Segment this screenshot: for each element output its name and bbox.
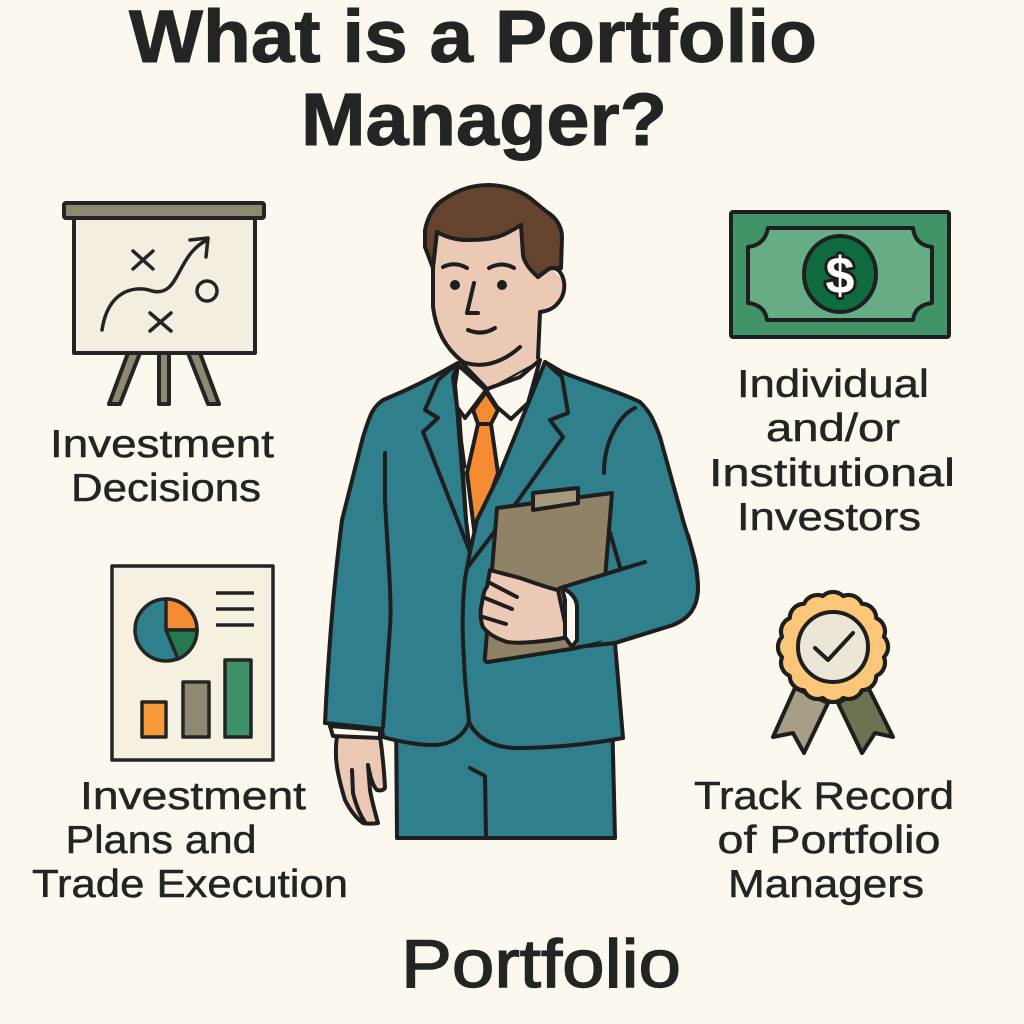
ear and neck: [538, 268, 564, 358]
icon: award ribbon badge: [773, 592, 893, 753]
figure: portfolio manager: [325, 185, 698, 838]
right cuff: [562, 588, 577, 647]
hand finger line: [352, 770, 365, 822]
label: track record: Track Record: [694, 775, 954, 818]
collar left: [455, 365, 486, 418]
jacket: [325, 362, 698, 748]
lapel right: [467, 362, 568, 568]
collar neck line: [462, 360, 540, 389]
hair: [425, 185, 562, 277]
fingers: [483, 583, 517, 624]
title: [129, 0, 817, 161]
label: investment plans: Plans and: [66, 819, 256, 862]
brows, nose and mouth: [443, 264, 514, 333]
shirt edges: [457, 407, 528, 473]
label: investors: [709, 363, 955, 539]
right sleeve fill: [562, 545, 696, 646]
trousers: [396, 712, 615, 838]
label: investment decisions: Investment: [50, 423, 274, 466]
label: track record: of Portfolio: [718, 819, 940, 862]
trouser pocket: [470, 768, 486, 838]
collar right: [486, 360, 540, 419]
clipboard: [485, 493, 612, 662]
lapel left: [423, 363, 470, 552]
tie: [467, 392, 498, 537]
eyes: [450, 280, 507, 290]
left hand: [336, 736, 385, 824]
hand holding clipboard: [481, 570, 568, 643]
icon: banknote: [731, 212, 949, 337]
label: investors: Investors: [737, 496, 921, 539]
face contour: [433, 265, 520, 365]
icon: strategy board on easel: [64, 203, 264, 404]
label: investors: and/or: [766, 407, 900, 450]
left cuff: [330, 726, 380, 738]
label: investors: Institutional: [709, 452, 955, 495]
label: track record: Managers: [728, 863, 924, 906]
jacket seams: [383, 408, 635, 727]
clipboard clip: [533, 488, 578, 510]
label: investment plans: Trade Execution: [32, 863, 348, 906]
label: investment decisions: [50, 423, 274, 510]
skin of head and neck: [433, 225, 563, 389]
title: Manager?: [301, 78, 667, 161]
tie knot line: [478, 422, 491, 426]
icon: banknote: $: [826, 247, 855, 305]
label: investment plans: [32, 775, 348, 906]
footer label: portfolio: Portfolio: [401, 926, 681, 1002]
label: track record: [694, 775, 954, 906]
label: investment decisions: Decisions: [71, 467, 261, 510]
label: investment plans: Investment: [80, 775, 306, 818]
right sleeve lines: [560, 533, 698, 647]
label: investors: Individual: [737, 363, 929, 406]
icon: report with charts: [112, 566, 273, 760]
shirt: [458, 362, 545, 552]
